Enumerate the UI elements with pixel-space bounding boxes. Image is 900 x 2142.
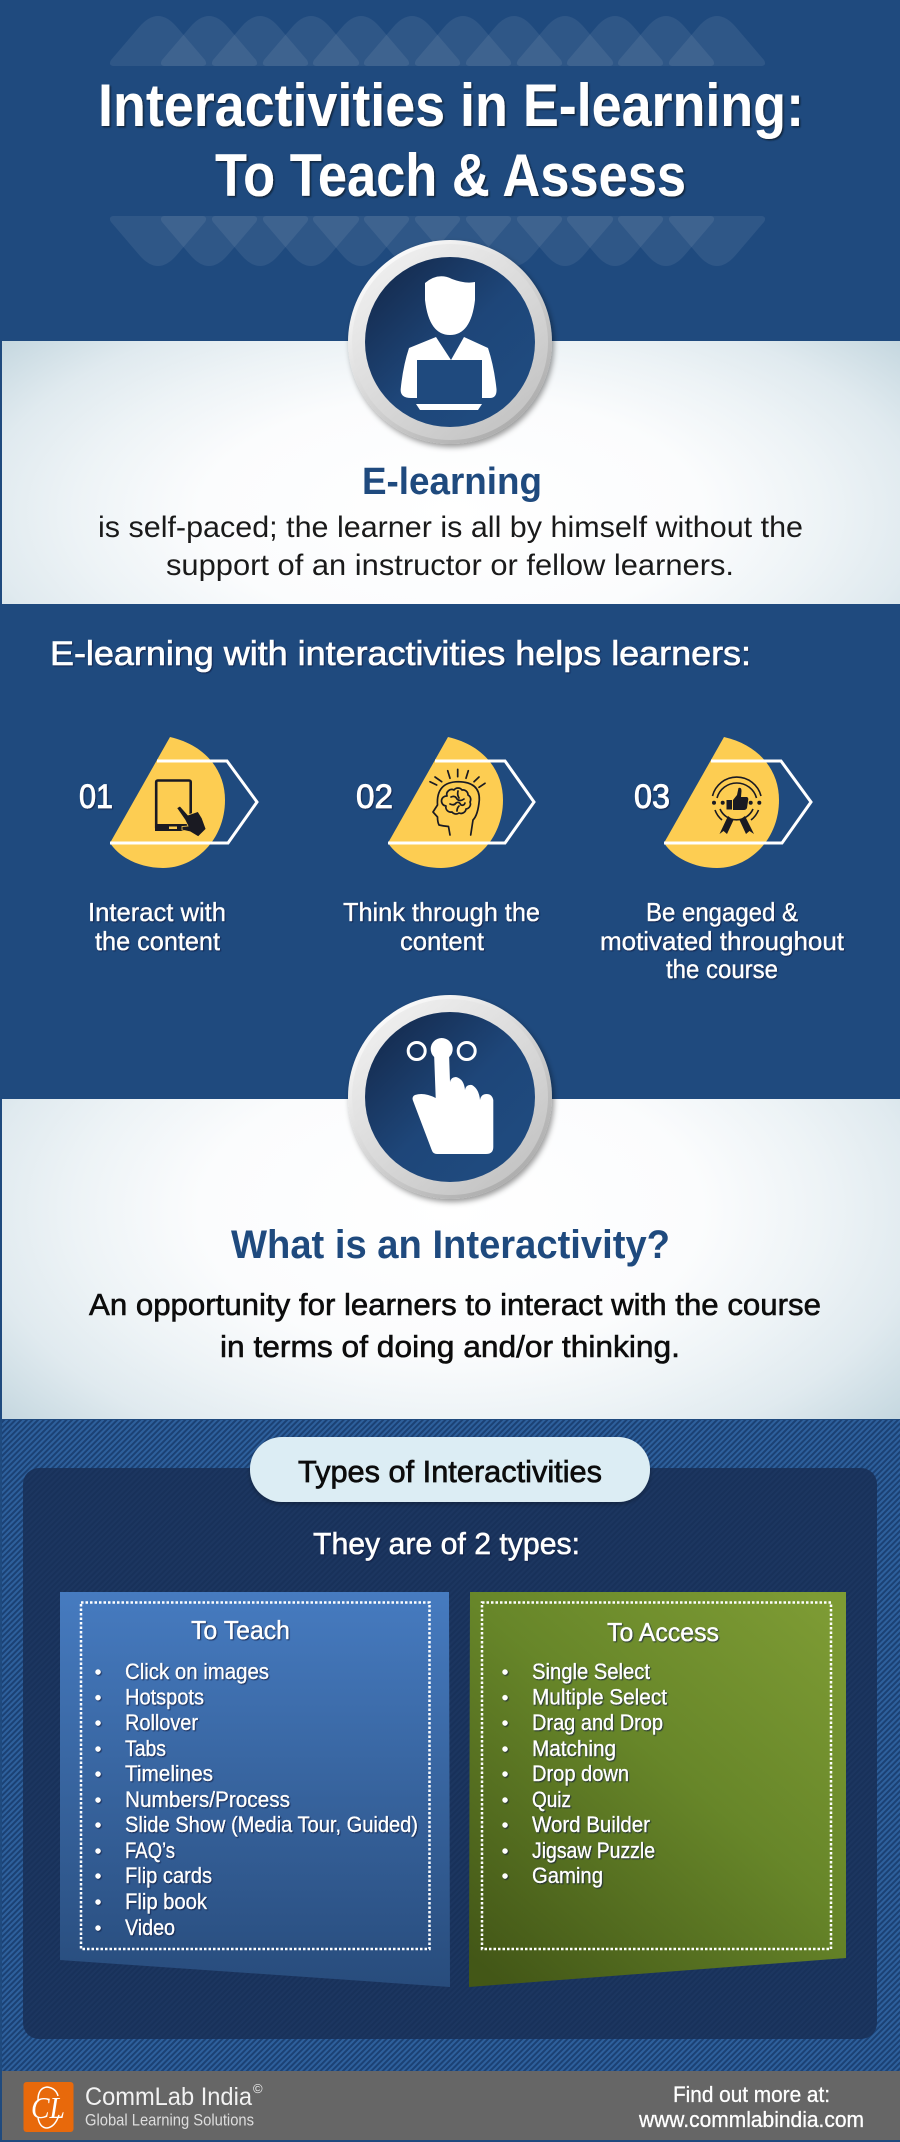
label: the content [95, 926, 221, 956]
bullet list [95, 1659, 418, 1940]
yellow drop [110, 737, 225, 868]
label [343, 897, 540, 956]
bullet list: FAQ’s [125, 1838, 175, 1863]
text: definition: in terms of doing and/or thinking. [220, 1329, 680, 1364]
find out more text: Find out more at: [673, 2082, 830, 2107]
label: the course [666, 954, 778, 984]
panel: e-learning definition [2, 341, 900, 604]
bullet list: Video [125, 1915, 175, 1940]
number 03: 03 [634, 778, 670, 816]
bullet list: Matching [532, 1736, 616, 1761]
bullet list: Click on images [125, 1659, 269, 1684]
card heading: To Access [607, 1617, 719, 1647]
label [88, 897, 226, 956]
title: Interactivities in E-learning: [98, 72, 804, 139]
yellow drop [388, 737, 503, 868]
bullet list: Drop down [532, 1761, 629, 1786]
label: Interact with [88, 897, 226, 927]
arrow outline [664, 761, 811, 843]
heading: helps learners: E-learning with interactivities helps learners: [50, 635, 751, 673]
logo: CommLab India [24, 2081, 263, 2132]
arrow outline [388, 761, 534, 843]
panel: types of interactivities [23, 1437, 877, 2039]
bullet list [502, 1659, 667, 1888]
icon: learner at laptop badge [348, 240, 552, 444]
bullet list: Flip cards [125, 1863, 212, 1888]
label: motivated throughout [600, 926, 845, 956]
bullet list: Flip book [125, 1889, 208, 1914]
bullet list: Gaming [532, 1863, 603, 1888]
bullet list: Single Select [532, 1659, 650, 1684]
heading: What is an Interactivity?: What is an Interactivity? [231, 1223, 670, 1267]
panel: what is an interactivity [2, 1099, 900, 1419]
logo: CommLab India: CL [31, 2090, 65, 2125]
decorative triangles top [110, 16, 765, 66]
text: definition [89, 1287, 821, 1364]
bullet list: Multiple Select [532, 1685, 667, 1710]
text: e-learning description: support of an instructor or fellow learners. [166, 549, 734, 582]
icon: thumbs-up award [712, 777, 761, 834]
subheading: They are of 2 types: [313, 1526, 580, 1561]
label: Think through the [343, 897, 540, 927]
logo: CommLab India: © [253, 2081, 263, 2096]
bullet list: Rollover [125, 1710, 198, 1735]
heading: E-learning: E-learning [362, 461, 542, 503]
number 02: 02 [356, 778, 393, 816]
pill heading [250, 1437, 650, 1502]
find out more text: www.commlabindia.com [638, 2107, 864, 2132]
bullet list: Tabs [125, 1736, 166, 1761]
title: To Teach & Assess [215, 142, 686, 209]
label [600, 897, 845, 984]
footer [2, 2071, 900, 2140]
bullet list: Slide Show (Media Tour, Guided) [125, 1812, 418, 1837]
step 01 [79, 737, 257, 956]
step 03 [600, 737, 845, 984]
bullet list: Timelines [125, 1761, 213, 1786]
bullet list: Word Builder [532, 1812, 650, 1837]
card heading: To Teach [191, 1615, 290, 1645]
text: definition: An opportunity for learners to interact with the course [89, 1287, 821, 1322]
decorative triangles bottom [110, 216, 765, 266]
bullet list: Jigsaw Puzzle [532, 1838, 655, 1863]
label: Be engaged & [646, 897, 798, 927]
step 02 [343, 737, 540, 956]
pill heading: Types of Interactivities [298, 1454, 602, 1489]
arrow outline [110, 761, 257, 843]
logo: CommLab India: CommLab India [85, 2083, 252, 2111]
text: e-learning description [98, 511, 803, 582]
label: content [400, 926, 485, 956]
bullet list: Quiz [532, 1787, 571, 1812]
logo: CommLab India: Global Learning Solutions [85, 2110, 254, 2130]
yellow drop [664, 737, 779, 868]
card: to teach [60, 1592, 450, 1987]
text: e-learning description: is self-paced; the learner is all by himself without the [98, 511, 803, 544]
find out more text [638, 2082, 864, 2132]
icon: tablet touch [155, 780, 206, 837]
card: to access [469, 1592, 846, 1987]
icon: finger tap badge [348, 995, 552, 1199]
icon: head with brain [430, 769, 485, 835]
bullet list: Hotspots [125, 1685, 204, 1710]
number 01: 01 [79, 778, 113, 816]
bullet list: Drag and Drop [532, 1710, 663, 1735]
bullet list: Numbers/Process [125, 1787, 290, 1812]
title [98, 72, 804, 209]
panel: types background [2, 1420, 900, 2072]
